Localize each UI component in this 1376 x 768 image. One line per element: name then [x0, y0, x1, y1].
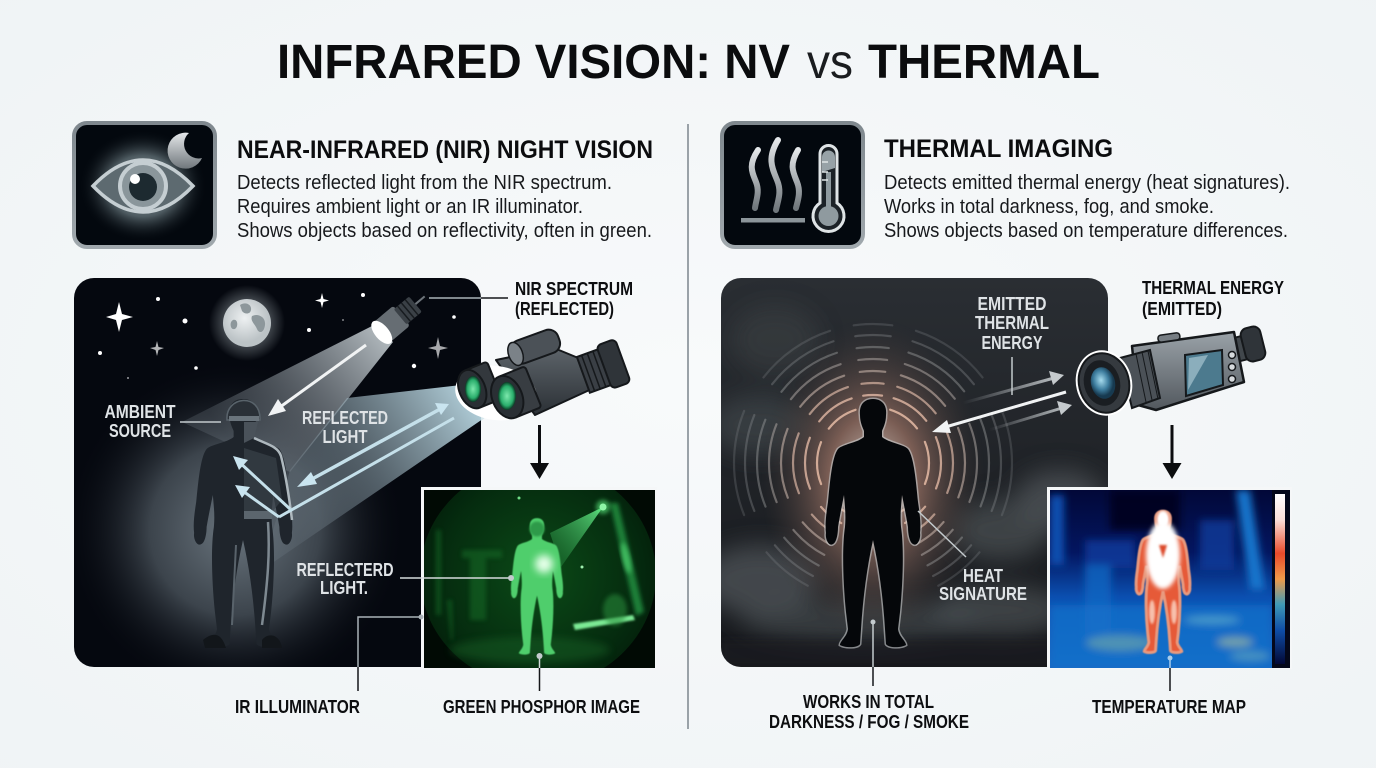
down arrow: goggles to image [530, 425, 549, 479]
soldier silhouette [194, 399, 292, 648]
flashlight beam [182, 325, 393, 472]
label: works in total darkness: DARKNESS / FOG / SMOKE [769, 712, 969, 732]
label: thermal energy emitted: THERMAL ENERGY [1142, 278, 1284, 298]
title: INFRARED VISION: NV [277, 36, 790, 89]
label: green phosphor image [443, 653, 640, 717]
description: near-infrared: Shows objects based on reflectivity, often in green. [237, 220, 652, 242]
icon: heat waves and thermometer [722, 123, 863, 247]
label: emitted thermal energy: ENERGY [982, 333, 1042, 353]
label: emitted thermal energy: EMITTED [978, 294, 1046, 314]
beam spill outside panel [481, 402, 497, 421]
stars [98, 293, 456, 379]
label: nir spectrum: (REFLECTED) [515, 299, 614, 319]
center divider [687, 124, 689, 729]
label: emitted thermal energy [975, 294, 1049, 395]
label: nir spectrum: NIR SPECTRUM [515, 279, 633, 299]
label: green phosphor image: GREEN PHOSPHOR IMAGE [443, 697, 640, 717]
label: reflecterd light: REFLECTERD [296, 560, 394, 580]
label: reflected light [302, 408, 388, 447]
label: heat signature [918, 511, 1027, 604]
label: temperature map: TEMPERATURE MAP [1092, 697, 1246, 717]
smoke clouds [700, 305, 1105, 642]
description: near-infrared: Requires ambient light or an IR illuminator. [237, 196, 583, 218]
label: reflected light: LIGHT [322, 427, 368, 447]
description: thermal imaging: Works in total darkness, fog, and smoke. [884, 196, 1214, 218]
label: ambient source: SOURCE [109, 421, 171, 441]
label: reflecterd light [296, 560, 514, 598]
down arrow: camera to map [1162, 425, 1182, 479]
label: reflecterd light: LIGHT. [320, 578, 368, 598]
label: heat signature: HEAT [963, 566, 1003, 586]
label: thermal energy emitted [1142, 278, 1284, 319]
heat figure [1136, 511, 1190, 653]
title: vs [807, 36, 853, 89]
description: near-infrared [237, 172, 652, 242]
inset: green phosphor image [421, 487, 655, 668]
night-vision goggles [452, 327, 631, 425]
label: nir spectrum [429, 279, 633, 319]
title: THERMAL [868, 36, 1100, 89]
label: ir illuminator: IR ILLUMINATOR [235, 697, 360, 717]
thermal camera [1069, 325, 1267, 422]
description: thermal imaging: Shows objects based on temperature differences. [884, 220, 1288, 242]
inset: temperature map [1047, 487, 1292, 669]
title [277, 36, 1100, 89]
label: reflected light: REFLECTED [302, 408, 388, 428]
heading: near-infrared: NEAR-INFRARED (NIR) NIGHT VISION [237, 136, 653, 164]
label: heat signature: SIGNATURE [939, 584, 1027, 604]
heat signature arcs [734, 324, 1012, 602]
goggles beam [273, 386, 481, 562]
description: near-infrared: Detects reflected light from the NIR spectrum. [237, 172, 612, 194]
moon [211, 287, 283, 359]
thermal energy arrows [932, 371, 1072, 433]
heat glow [776, 342, 971, 611]
panel: near-infrared scene [74, 278, 497, 667]
label: ir illuminator [235, 614, 424, 717]
label: temperature map [1092, 656, 1246, 717]
thermal person silhouette [826, 399, 920, 647]
heading: thermal imaging: THERMAL IMAGING [884, 135, 1113, 163]
label: ambient source: AMBIENT [104, 402, 176, 422]
label: works in total darkness [769, 620, 969, 732]
label: ambient source [104, 402, 221, 441]
label: thermal energy emitted: (EMITTED) [1142, 299, 1222, 319]
label: emitted thermal energy: THERMAL [975, 313, 1049, 333]
description: thermal imaging [884, 172, 1290, 242]
icon: eye and moon [74, 123, 215, 247]
light arrows [233, 345, 454, 517]
flashlight [367, 286, 434, 348]
colour scale bar [1275, 494, 1285, 664]
panel: thermal scene [700, 278, 1108, 667]
label: works in total darkness: WORKS IN TOTAL [803, 692, 934, 712]
description: thermal imaging: Detects emitted thermal energy (heat signatures). [884, 172, 1290, 194]
